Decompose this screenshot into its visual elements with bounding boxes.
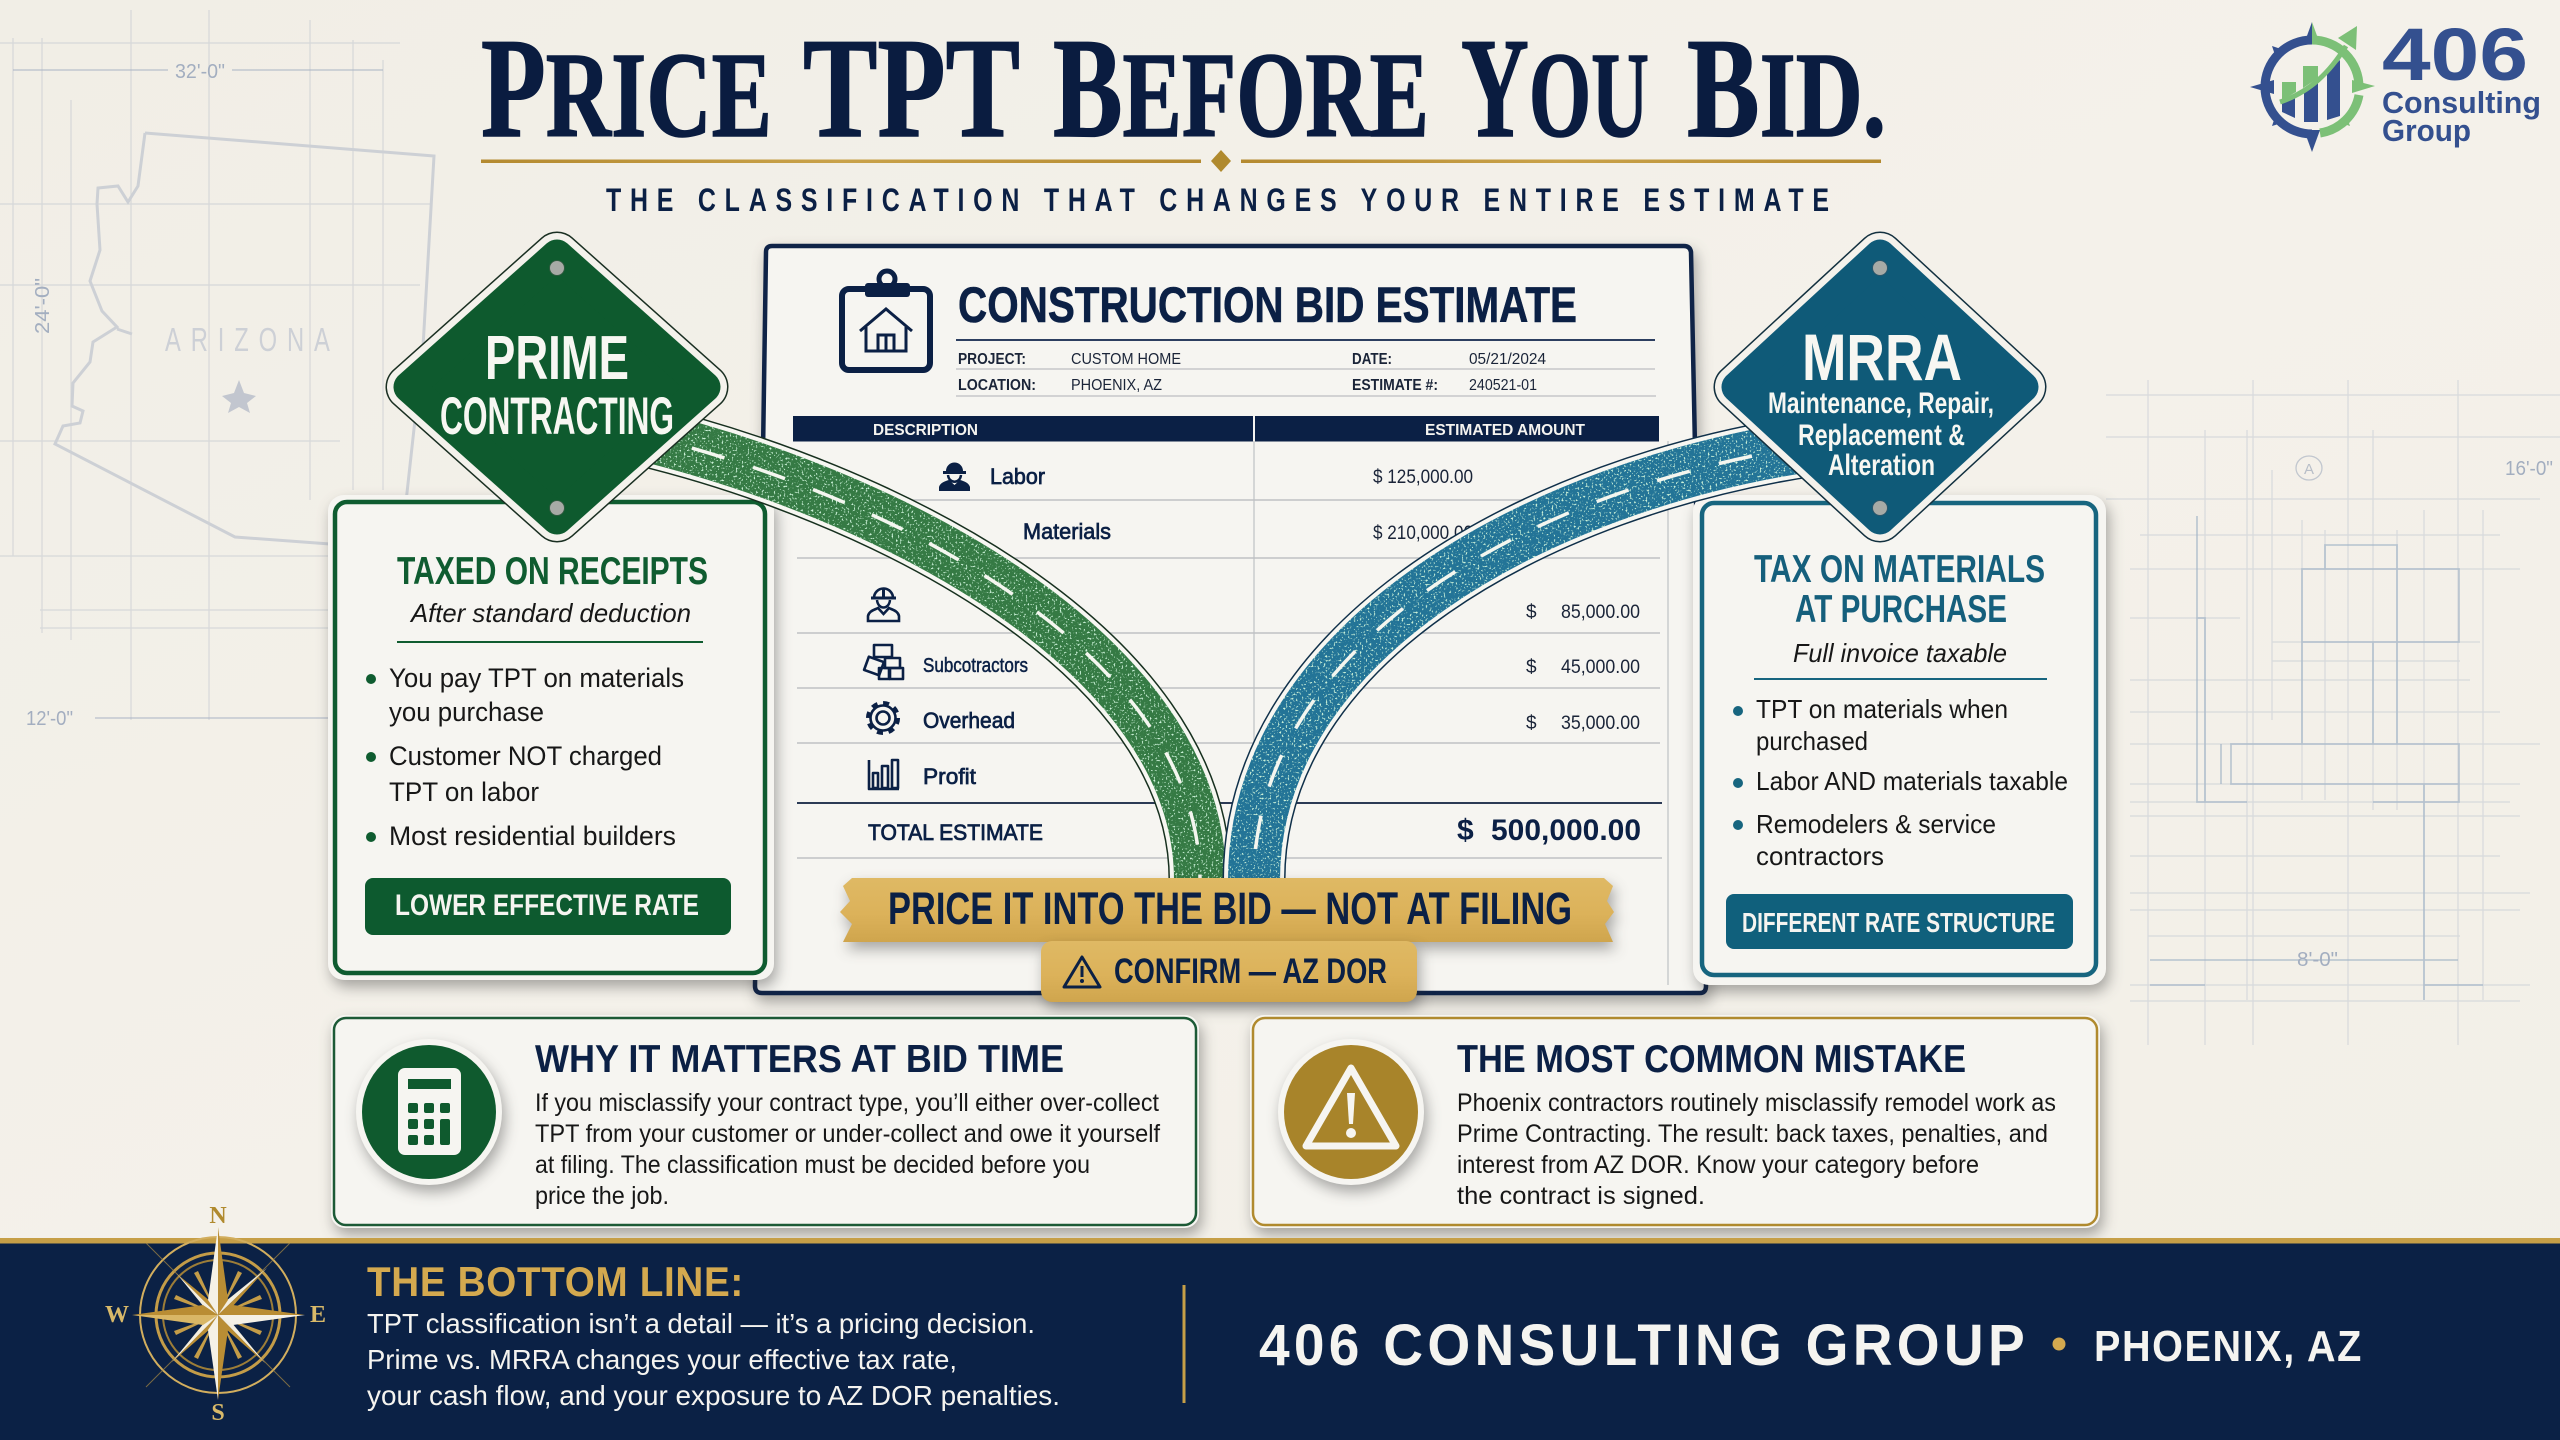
outline of Arizona: [55, 133, 434, 544]
bottom line text: TPT classification isn’t a detail — it’s a pricing decision.: [367, 1308, 1035, 1339]
project details: [956, 340, 1656, 396]
sign: MRRA: MRRA: [1802, 320, 1962, 394]
callout: confirm with AZ DOR: CONFIRM — AZ DOR: [1114, 952, 1387, 991]
body text: Phoenix contractors routinely misclassify remodel work as: [1457, 1089, 2056, 1117]
body text: at filing. The classification must be decided before you: [535, 1151, 1090, 1179]
icon: calculator: [356, 1039, 502, 1185]
icon: warning triangle: [1064, 957, 1100, 987]
logo: 406 Consulting Group: Group: [2382, 113, 2471, 148]
bullet list: Customer NOT charged: [389, 741, 662, 771]
bullet list: contractors: [1756, 841, 1884, 871]
heading: [1754, 548, 2045, 631]
title divider: [481, 150, 1881, 172]
title: YOU: [1461, 9, 1649, 167]
bullet list: [1733, 694, 2068, 871]
dimension 16 feet: 16'-0": [2505, 458, 2553, 480]
heading: THE MOST COMMON MISTAKE: [1457, 1038, 1966, 1081]
location: PHOENIX, AZ: [2094, 1321, 2361, 1370]
row: overhead: [868, 703, 1640, 734]
sign: prime contracting: [409, 255, 705, 519]
badge: [365, 878, 731, 935]
card: why it matters: [331, 1015, 1199, 1228]
bullet list: You pay TPT on materials: [389, 663, 684, 693]
bottom line text: your cash flow, and your exposure to AZ DOR penalties.: [367, 1380, 1060, 1411]
icon: worker filled: [939, 462, 970, 491]
row: equipment: [868, 588, 1640, 623]
logo: 406 Consulting Group: [2250, 13, 2541, 152]
body text: If you misclassify your contract type, you’ll either over-collect: [535, 1089, 1159, 1117]
grid marker A: [2296, 456, 2322, 480]
dimension 24 feet: 24'-0": [32, 278, 54, 334]
clipboard icon: [842, 271, 930, 370]
bottom line heading: THE BOTTOM LINE:: [367, 1257, 743, 1305]
row: labor: Labor: [990, 464, 1045, 489]
title: BEFORE: [1053, 9, 1429, 167]
dimension 8 feet: 8'-0": [2297, 949, 2338, 971]
road: green prime path: [630, 432, 1200, 880]
row: subcontractors: [864, 645, 1640, 679]
sign: MRRA: Maintenance, Repair,: [1768, 387, 1994, 420]
icon: boxes: [864, 645, 903, 679]
row: labor: [939, 462, 1473, 491]
title: BID.: [1687, 9, 1886, 167]
bullet list: Remodelers & service: [1756, 809, 1996, 839]
badge: [1726, 894, 2073, 949]
project details: DATE:: [1352, 351, 1392, 368]
document heading: CONSTRUCTION BID ESTIMATE: [958, 277, 1577, 333]
icon: bar chart: [869, 760, 899, 789]
sign: MRRA: Replacement &: [1798, 419, 1965, 452]
table header: [793, 416, 1659, 442]
bottom line text: [367, 1308, 1060, 1411]
subtitle: THE CLASSIFICATION THAT CHANGES YOUR ENTIRE ESTIMATE: [606, 183, 1829, 219]
card: most common mistake: [1250, 1015, 2100, 1228]
title: PRICE: [481, 9, 772, 167]
panel: MRRA details: [1693, 495, 2106, 985]
project details: PROJECT:: [958, 351, 1026, 368]
row: profit: [869, 760, 976, 789]
row: materials: [1023, 519, 1473, 544]
row: subcontractors: 45,000.00: [1561, 657, 1640, 678]
dimension 32 feet: 32'-0": [175, 61, 225, 83]
project details: CUSTOM HOME: [1071, 351, 1181, 368]
row: overhead: $: [1526, 713, 1537, 734]
table header: ESTIMATED AMOUNT: [1425, 422, 1585, 439]
icon: warning: [1278, 1039, 1424, 1185]
row: materials: Materials: [1023, 519, 1111, 544]
road: blue MRRA path: [1254, 445, 1815, 880]
estimate document: [755, 246, 1706, 993]
heading: TAX ON MATERIALS: [1754, 548, 2045, 591]
project details: 240521-01: [1469, 377, 1537, 394]
row: total: [868, 814, 1641, 847]
icon: compass rose: [105, 1203, 326, 1426]
icon: gear: [868, 703, 898, 733]
project details: 05/21/2024: [1469, 351, 1546, 368]
dimension 12 feet: 12'-0": [26, 708, 73, 730]
compass letters: W: [105, 1302, 129, 1328]
body text: [1457, 1089, 2056, 1210]
bullet list: you purchase: [389, 697, 544, 727]
sign: prime contracting: CONTRACTING: [440, 387, 674, 446]
badge: LOWER EFFECTIVE RATE: [395, 889, 699, 922]
compass letters: N: [209, 1203, 227, 1229]
title: [481, 9, 1886, 167]
row: overhead: Overhead: [923, 708, 1015, 733]
panel: prime contracting details: [328, 495, 774, 980]
body text: price the job.: [535, 1182, 669, 1210]
sign: prime contracting: PRIME: [485, 324, 629, 393]
bullet list: TPT on labor: [389, 777, 539, 807]
table header: DESCRIPTION: [873, 422, 978, 439]
callout: confirm with AZ DOR: [1041, 941, 1417, 1002]
body text: Prime Contracting. The result: back taxes, penalties, and: [1457, 1120, 2048, 1148]
row: total: $: [1457, 814, 1474, 847]
row: equipment: 85,000.00: [1561, 602, 1640, 623]
row: profit: Profit: [923, 764, 976, 789]
body text: the contract is signed.: [1457, 1182, 1705, 1210]
logo wordmark: 406: [2382, 13, 2528, 96]
subheading: After standard deduction: [409, 598, 691, 628]
row: overhead: 35,000.00: [1561, 713, 1640, 734]
project details: ESTIMATE #:: [1352, 377, 1438, 394]
capital star: [222, 380, 256, 413]
row: equipment: $: [1526, 602, 1537, 623]
bullet list: purchased: [1756, 726, 1868, 756]
project details: PHOENIX, AZ: [1071, 377, 1162, 394]
row: subcontractors: $: [1526, 657, 1537, 678]
title: TPT: [803, 9, 1020, 167]
Arizona label: ARIZONA: [165, 322, 331, 359]
bullet list: Most residential builders: [389, 821, 676, 851]
subheading: Full invoice taxable: [1793, 638, 2007, 668]
heading: WHY IT MATTERS AT BID TIME: [535, 1038, 1064, 1081]
row: subcontractors: Subcotractors: [923, 655, 1028, 677]
bottom band: [0, 1203, 2560, 1440]
paper sheet: [755, 246, 1706, 993]
badge: DIFFERENT RATE STRUCTURE: [1742, 907, 2055, 938]
compass letters: E: [310, 1302, 326, 1328]
sign: MRRA: [1737, 255, 2023, 519]
grid marker A: A: [2304, 461, 2314, 478]
bullet list: [366, 663, 684, 851]
logo compass mark: [2250, 22, 2375, 152]
bottom line text: Prime vs. MRRA changes your effective tax rate,: [367, 1344, 957, 1375]
row: total: TOTAL ESTIMATE: [868, 820, 1043, 845]
bullet list: Labor AND materials taxable: [1756, 766, 2068, 796]
project details: LOCATION:: [958, 377, 1036, 394]
sign: MRRA: Alteration: [1828, 449, 1935, 482]
row: labor: $ 125,000.00: [1373, 467, 1473, 488]
row: total: 500,000.00: [1491, 814, 1641, 847]
body text: interest from AZ DOR. Know your category before: [1457, 1151, 1979, 1179]
blueprint: floor plan: [2106, 380, 2560, 1045]
ribbon banner: [840, 878, 1614, 942]
compass letters: [105, 1203, 326, 1426]
heading: TAXED ON RECEIPTS: [397, 550, 708, 593]
ribbon banner: PRICE IT INTO THE BID — NOT AT FILING: [888, 883, 1572, 934]
row: materials: $ 210,000.00: [1373, 523, 1473, 544]
bullet list: TPT on materials when: [1756, 694, 2008, 724]
icon: worker outline: [868, 588, 899, 621]
body text: TPT from your customer or under-collect and owe it yourself: [535, 1120, 1160, 1148]
blueprint: Arizona map: [0, 10, 434, 730]
logo: 406 Consulting Group: Consulting: [2382, 85, 2541, 120]
heading: AT PURCHASE: [1795, 588, 2007, 631]
body text: [535, 1089, 1160, 1210]
compass letters: S: [211, 1400, 225, 1426]
company name: 406 CONSULTING GROUP: [1259, 1313, 2025, 1377]
